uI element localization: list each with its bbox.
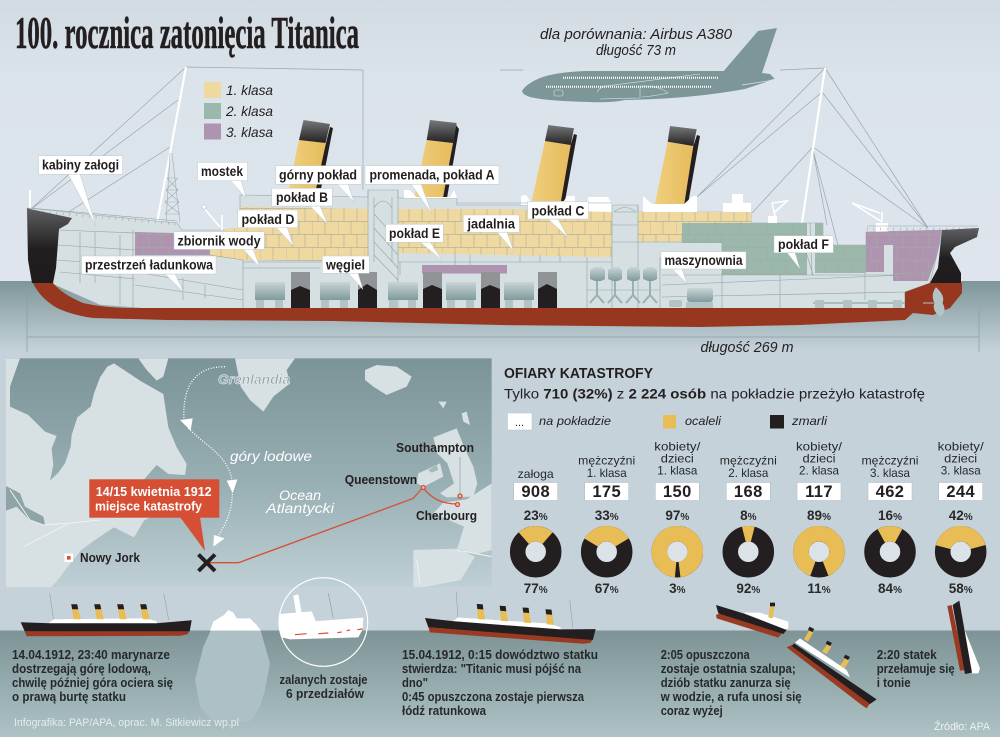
text: lifeboats: 0:45 opuszczona zostaje pierwsza [402,690,585,704]
legend: chart [508,413,827,430]
text: collision: chwilę później góra ociera się [12,676,173,690]
label: pokład B: pokład B [276,190,328,205]
map: North Atlantic route [6,358,492,587]
map labels [80,372,477,565]
label: pokład D: pokład D [242,212,295,227]
label: pokład C: pokład C [532,204,585,218]
red hull bottom [33,283,962,327]
Southampton connector [459,457,461,496]
subheading: Tylko 710 (32%) z 2 224 osób na pokładzie przeżyło katastrofę [504,386,925,402]
ship 5: vertical stern [947,601,980,674]
label: mostek [198,162,248,198]
legend: passenger classes: 1. klasa [226,82,273,98]
donut: women and children second class: 89% [807,508,831,523]
donut: women and children first class: kobiety/ [654,440,701,454]
legend: passenger classes: 2. klasa [225,103,273,119]
detail circle: flooded compartments [279,578,368,666]
label: kabiny załogi [38,156,122,226]
ship length text: długość 269 m [700,340,794,356]
ship: hull and decks [27,190,979,327]
iceberg [195,610,270,722]
callout: disaster site: miejsce katastrofy [95,498,203,514]
icon: sinking location X [198,554,215,571]
text: last lifeboat: zostaje ostatnia szalupa; [661,662,796,676]
text: breaking apart [877,648,955,690]
second class decks [682,223,807,275]
engines [590,267,657,281]
label: przestrzeń ładunkowa [82,256,216,292]
donut: men second class [720,454,777,596]
donut: women and children first class [654,440,701,596]
label: kabiny załogi: kabiny załogi [42,158,119,172]
donut: women and children first class: 150 [663,483,692,501]
text: collision: o prawą burtę statku [12,690,126,704]
donut: men third class: 3. klasa [870,466,910,480]
map labels: Cherbourg [416,509,477,523]
ship 2: down by the bow [424,589,598,645]
donut: crew: 908 [521,483,550,501]
donut: women and children first class: dzieci [661,452,694,466]
donut: men second class: 8% [740,508,757,523]
propeller [923,288,944,316]
text: lifeboats: dno" [402,676,428,690]
donut: men second class: 168 [734,483,763,501]
credit: Infografika: PAP/APA, oprac. M. Sitkiewicz wp.pl [14,717,239,729]
map labels: Queenstown [345,473,417,487]
label: pokład C [528,202,588,238]
donut: crew: 23% [524,508,548,523]
label: pokład F [774,236,833,269]
label: pokład B [272,188,332,224]
sea under the ship [0,281,1000,351]
map labels: Grenlandia [218,372,290,387]
donut: women and children third class: dzieci [944,452,977,466]
label: zbiornik wody [174,232,264,268]
label: mostek: mostek [201,164,243,179]
text: lifeboats: 15.04.1912, 0:15 dowództwo statku [402,648,598,662]
label: pokład E: pokład E [389,226,440,241]
text: collision: dostrzegają górę lodową, [12,662,151,676]
ship 4: bow under water [787,627,877,708]
text: breaking apart: 2:20 statek [877,648,937,662]
donut: men first class: 67% [595,581,619,596]
map labels: góry lodowe [230,449,312,464]
label: pokład D [238,210,298,246]
label: jadalnia [463,215,519,251]
label: zbiornik wody: zbiornik wody [178,234,261,248]
text: collision [12,648,173,704]
donut: men third class [862,454,918,596]
background sky [0,0,1000,282]
donut: men second class: mężczyźni [720,454,777,468]
donut: women and children second class: 11% [807,581,831,596]
donut: men first class: 175 [592,483,621,501]
funnel 3 [532,125,577,201]
donut: men third class: 462 [876,483,904,501]
legend: passenger classes [204,82,273,140]
heading: victims: OFIARY KATASTROFY [504,366,653,382]
donut: men second class: 92% [736,581,760,596]
boilers [255,282,285,300]
comparison caption [540,27,732,59]
label: przestrzeń ładunkowa: przestrzeń ładunkowa [85,258,213,272]
donut: crew [510,467,561,596]
donut: women and children first class: 1. klasa [657,464,698,478]
funnel 4 [655,126,700,204]
donut: men first class: mężczyźni [578,454,635,468]
donut: women and children third class: kobiety/ [938,440,984,454]
donut: women and children second class: dzieci [802,452,836,466]
donut: men third class: 16% [878,508,902,523]
label: węgiel [322,256,369,290]
hull body [28,190,943,322]
text: flooded compartments: 6 przedziałów [286,687,364,701]
comparison caption: długość 73 m [596,43,676,59]
legend: chart: zmarli [791,414,827,428]
text: last lifeboat: coraz wyżej [661,704,723,718]
dimension line [27,283,979,352]
text: last lifeboat [660,648,802,718]
text: lifeboats [402,648,598,718]
text: last lifeboat: 2:05 opuszczona [661,648,751,662]
donut: women and children second class: 117 [805,483,833,501]
label: górny pokład: górny pokład [279,168,357,182]
black stern [930,228,979,283]
label: pokład F: pokład F [778,237,829,252]
ship 3: stern rising [716,603,788,638]
propeller shaft [813,302,905,304]
donut: crew: 77% [524,581,548,596]
text: breaking apart: przełamuje się [877,662,955,676]
donut: men first class: 33% [595,508,619,523]
label: promenada, pokład A: promenada, pokład A [370,168,495,182]
legend: chart: ... [515,417,524,429]
label: węgiel: węgiel [325,258,365,272]
text: collision: 14.04.1912, 23:40 marynarze [12,648,170,662]
marker: New York [64,554,73,562]
sea at the bottom [0,630,1000,737]
donut: men first class [578,454,635,596]
text: last lifeboat: w wodzie, a rufa unosi się [660,690,802,704]
icon: Airbus A380 [522,28,777,102]
text: breaking apart: i tonie [877,676,911,690]
deck rails [30,211,978,229]
background lower panel [0,350,1000,631]
text: flooded compartments [280,673,368,701]
iceberg drift arrows [180,367,237,547]
donut: women and children third class: 3. klasa [941,464,981,478]
label: maszynownia [661,252,746,284]
port markers [421,486,462,506]
cranes [203,201,882,230]
title: 100. rocznica zatonięcia Titanica [15,8,359,58]
callout: disaster site [89,479,219,551]
black bow [27,208,72,283]
donut: women and children first class: 97% [665,508,689,523]
lakes and rivers [6,486,45,525]
funnel 2 [414,120,459,198]
label: promenada, pokład A [365,166,499,214]
first class decks [210,207,368,262]
ship rigging and masts [30,67,928,245]
funnel 1 [289,120,333,189]
map labels: Atlantycki [265,501,335,516]
map background and land [6,358,492,587]
donut: women and children second class [796,440,843,596]
map labels: Nowy Jork [80,551,140,565]
legend: chart: ocaleli [685,414,721,428]
deck lines [57,190,905,308]
source: Źródło: APA [934,720,991,733]
donut: men second class: 2. klasa [728,466,769,480]
donut: crew: załoga [518,467,554,481]
donut: men first class: 1. klasa [587,466,627,480]
donut: men third class: mężczyźni [862,454,918,468]
comparison caption: dla porównania: Airbus A380 [540,27,732,43]
label: pokład E [386,224,443,260]
map labels: Southampton [396,441,474,455]
text: lifeboats: stwierdza: "Titanic musi pójść na [402,662,582,676]
donut: women and children second class: kobiety/ [796,440,843,454]
callout: disaster site: 14/15 kwietnia 1912 [96,484,212,499]
map labels: Ocean [279,488,321,503]
donut: women and children third class: 42% [949,508,973,523]
legend: passenger classes: 3. klasa [226,124,273,140]
legend: chart: na pokładzie [539,414,611,428]
route line [207,488,457,563]
text: lifeboats: łódź ratunkowa [402,704,487,718]
label: jadalnia: jadalnia [467,216,515,232]
donut: women and children third class: 244 [946,483,975,501]
text: last lifeboat: dziób statku zanurza się [661,676,791,690]
label: maszynownia: maszynownia [664,253,743,268]
donut: women and children third class: 58% [949,581,973,596]
donut: men third class: 84% [878,581,902,596]
label: górny pokład [276,166,361,202]
donut: women and children second class: 2. klasa [799,464,839,478]
white deckhouses [404,190,888,232]
coal bunkers [291,272,557,308]
donut: women and children third class [938,440,984,596]
text: flooded compartments: zalanych zostaje [280,673,368,687]
ship 1: collision [21,593,192,636]
third class decks [135,232,210,255]
donut: women and children first class: 3% [669,581,686,596]
